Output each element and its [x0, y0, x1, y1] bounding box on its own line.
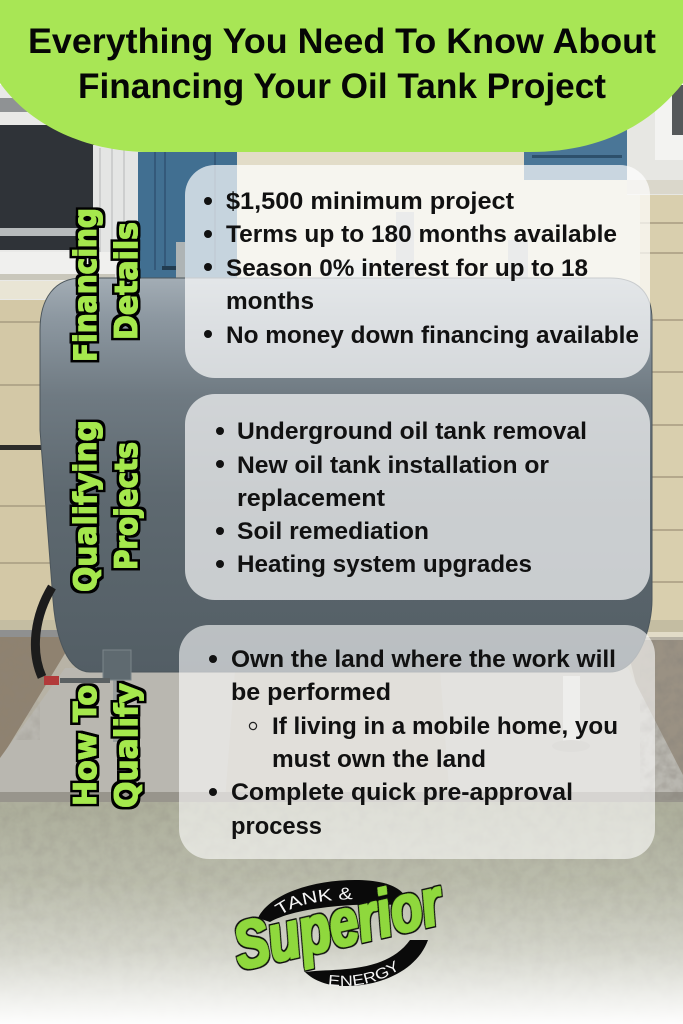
panel: qualifying projects	[185, 394, 650, 600]
qualifying list text	[237, 418, 587, 578]
financing list text: Season 0% interest for up to 18	[226, 255, 588, 282]
heading: financing details	[68, 208, 145, 362]
how to qualify list text: Complete quick pre-approval	[231, 779, 573, 806]
how to qualify list text: be performed	[231, 679, 391, 706]
left shutter	[138, 152, 237, 282]
ground: dirt, gravel, concrete pad	[0, 637, 683, 1024]
heading: qualifying projects: Projects	[109, 442, 145, 570]
tank legs and pipes	[35, 587, 590, 752]
how to qualify list text: If living in a mobile home, you	[272, 713, 618, 740]
heading: how to qualify: Qualify	[109, 683, 145, 808]
panel: how to qualify	[179, 625, 655, 859]
right window	[627, 85, 683, 195]
logo small text	[274, 888, 396, 986]
heading: how to qualify	[68, 683, 145, 808]
financing list text: Terms up to 180 months available	[226, 221, 617, 248]
qualifying list text: Heating system upgrades	[237, 551, 532, 578]
how to qualify list text: Own the land where the work will	[231, 646, 616, 673]
oil tank	[40, 278, 652, 672]
financing list text: months	[226, 288, 314, 315]
qualifying list text: New oil tank installation or	[237, 452, 549, 479]
heading: financing details: Details	[109, 222, 145, 340]
title line 2: Financing Your Oil Tank Project	[78, 66, 606, 106]
financing list text	[226, 188, 639, 349]
panel: financing details	[185, 165, 650, 378]
tank fittings	[325, 212, 528, 280]
heading: financing details: Financing	[68, 208, 104, 362]
heading: how to qualify: How To	[68, 685, 104, 806]
financing list text: No money down financing available	[226, 322, 639, 349]
qualifying list text: Underground oil tank removal	[237, 418, 587, 445]
title banner	[0, 0, 683, 152]
how to qualify list text: must own the land	[272, 746, 486, 773]
logo: Superior Tank & Energy	[226, 862, 452, 986]
logo wordmark: Superior	[226, 862, 452, 984]
qualifying list text: replacement	[237, 485, 385, 512]
qualifying list text: Soil remediation	[237, 518, 429, 545]
heading: qualifying projects: Qualifying	[68, 420, 104, 592]
white fade to bottom	[0, 800, 683, 1024]
heading: qualifying projects	[68, 420, 145, 592]
logo small text: ENERGY	[329, 960, 396, 986]
logo small text: TANK &	[274, 888, 352, 913]
right shutter	[524, 130, 630, 180]
siding wall	[0, 150, 683, 650]
financing list text: $1,500 minimum project	[226, 188, 514, 215]
logo ring	[258, 880, 428, 986]
left window	[0, 85, 140, 300]
how to qualify list text: process	[231, 813, 322, 840]
how to qualify list text	[231, 646, 618, 840]
title line 1: Everything You Need To Know About	[28, 21, 656, 61]
